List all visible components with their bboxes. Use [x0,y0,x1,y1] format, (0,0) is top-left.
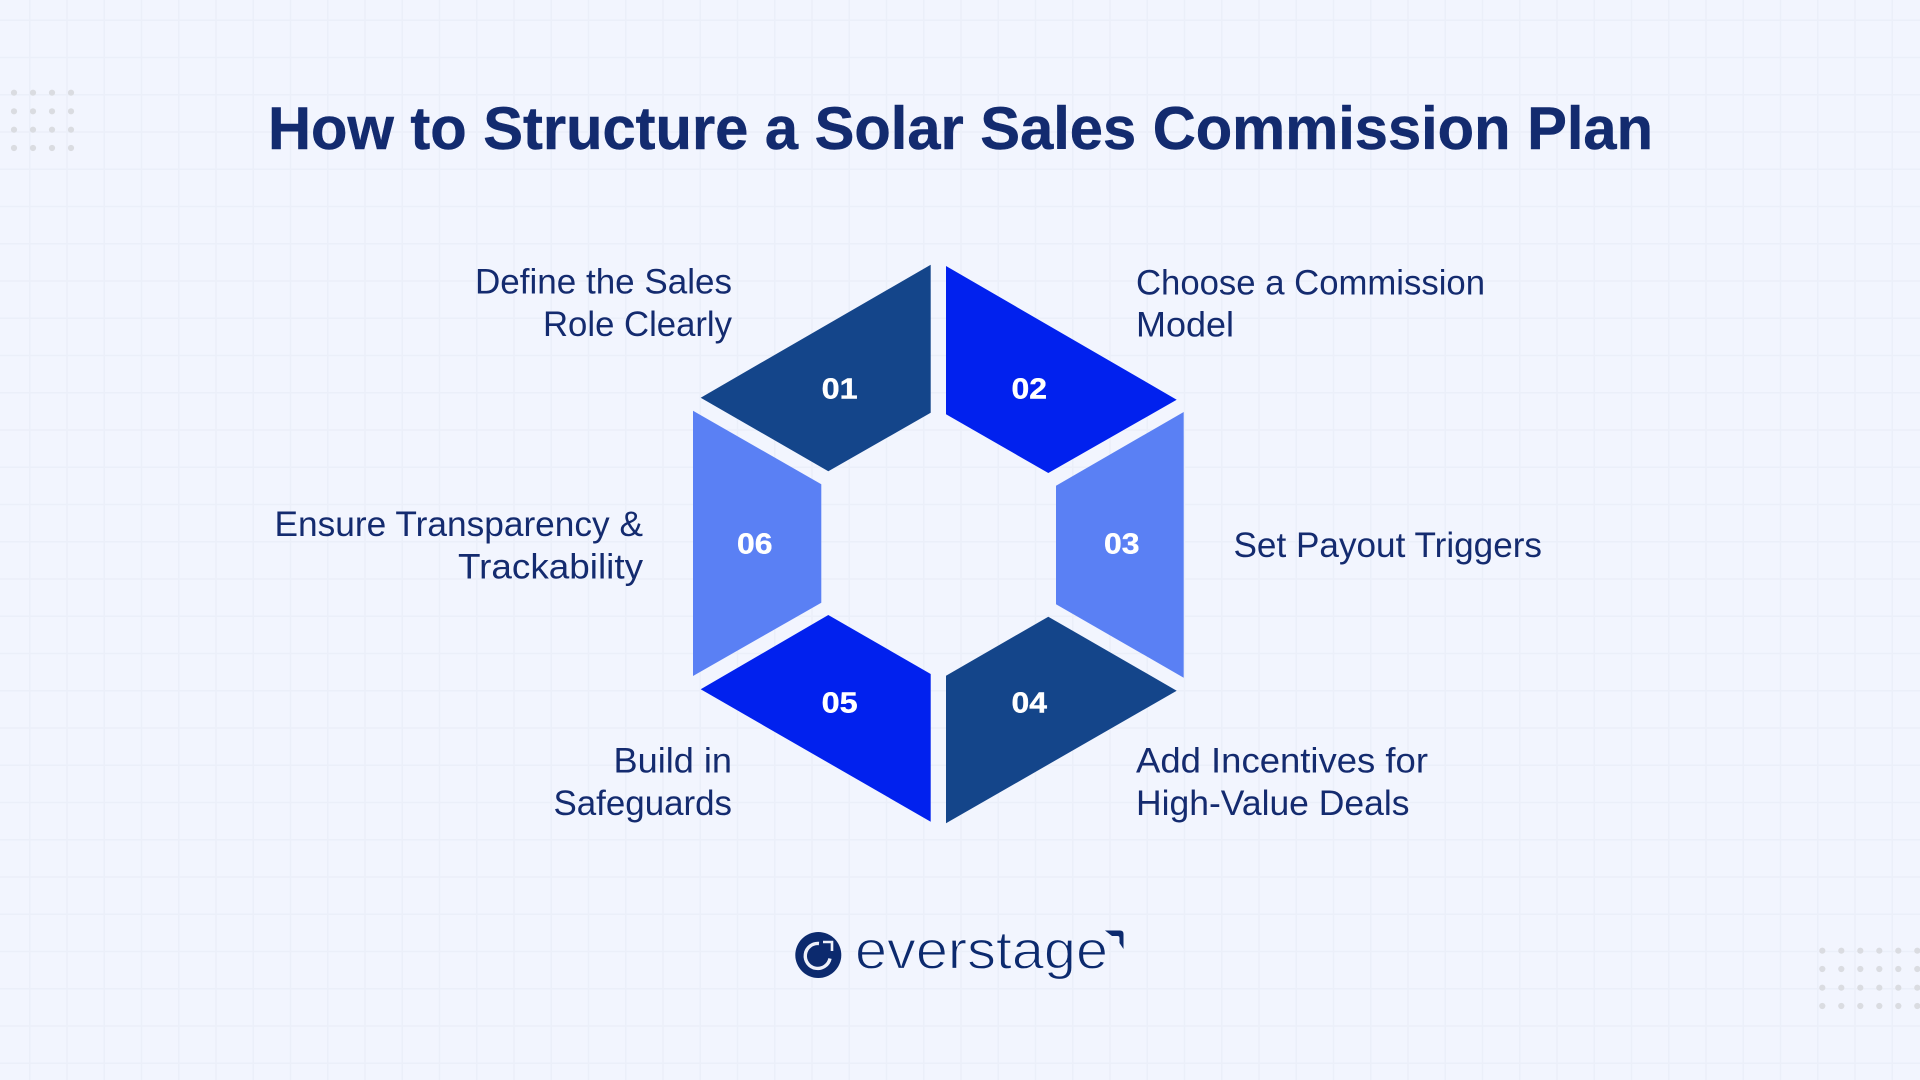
logo wordmark: everstage [855,920,1108,980]
segment 06: 06 [737,528,772,560]
label: Ensure Transparency & Trackability: Ensure Transparency & [274,505,643,544]
label: Choose a Commission Model: Choose a Commission [1136,264,1485,303]
label: Add Incentives for High-Value Deals: Add Incentives for [1136,741,1428,780]
logo: everstage [795,920,1124,980]
segment 01: 01 [822,373,858,405]
segment 03 [1056,412,1184,678]
label: Build in Safeguards: Build in [614,741,732,780]
segment 02: 02 [1012,373,1047,405]
label: Define the Sales Role Clearly: Role Clearly [543,305,732,344]
label: Ensure Transparency & Trackability: Trackability [458,548,644,587]
label: Build in Safeguards: Safeguards [554,784,732,823]
logo icon [795,932,841,978]
label: Add Incentives for High-Value Deals [1136,741,1428,823]
label: Define the Sales Role Clearly: Define the Sales [475,262,732,301]
decorative dots: bottom right [1819,948,1920,1009]
segment 05 [701,615,931,822]
label: Choose a Commission Model: Model [1136,306,1234,345]
segment 06 [693,411,821,676]
label: Build in Safeguards [554,741,732,823]
segment 01 [701,265,931,471]
decorative dots: top left [11,90,74,151]
hexagon diagram [693,265,1184,823]
label: Add Incentives for High-Value Deals: High-Value Deals [1136,784,1410,823]
segment 03: 03 [1104,528,1140,560]
label: Ensure Transparency & Trackability [274,505,644,587]
title: How to Structure a Solar Sales Commission Plan [268,95,1653,162]
segment 04 [946,617,1177,823]
segment 05: 05 [822,688,858,720]
logo corner mark [1105,930,1124,949]
segment 02 [946,266,1177,473]
label: Set Payout Triggers: Set Payout Triggers [1234,526,1542,565]
label: Choose a Commission Model [1136,264,1485,345]
segment 04: 04 [1012,688,1047,720]
label: Define the Sales Role Clearly [475,262,732,344]
